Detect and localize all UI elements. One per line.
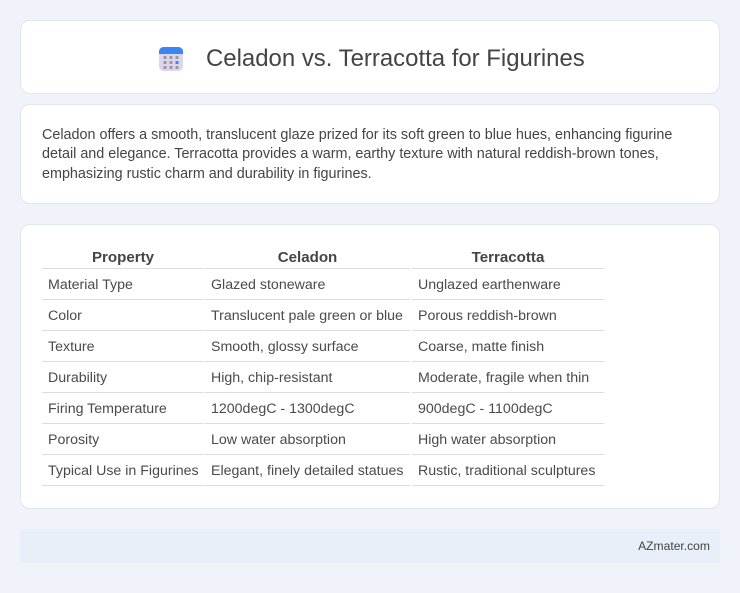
intro text [42, 126, 672, 182]
comparison table: High, chip-resistant [211, 370, 332, 386]
comparison table: Moderate, fragile when thin [418, 370, 589, 386]
comparison table: Elegant, finely detailed statues [211, 463, 403, 479]
table card [20, 224, 720, 509]
header card [20, 20, 720, 94]
comparison table: Glazed stoneware [211, 277, 325, 293]
comparison table: Color [48, 308, 82, 324]
footer bar [20, 529, 720, 563]
comparison table: Low water absorption [211, 432, 346, 448]
comparison table: Coarse, matte finish [418, 339, 544, 355]
comparison table: Texture [48, 339, 95, 355]
intro card [20, 104, 720, 204]
title: Celadon vs. Terracotta for Figurines [206, 45, 585, 72]
comparison table [42, 249, 604, 486]
intro text: emphasizing rustic charm and durability in figurines. [42, 166, 372, 182]
intro text: Celadon offers a smooth, translucent glaze prized for its soft green to blue hues, enhancing figurine [42, 126, 672, 142]
comparison table: Porous reddish-brown [418, 308, 557, 324]
comparison table: Firing Temperature [48, 401, 167, 417]
comparison table: Porosity [48, 432, 99, 448]
comparison table: Unglazed earthenware [418, 277, 561, 293]
comparison table: 1200degC - 1300degC [211, 401, 355, 417]
comparison table: 900degC - 1100degC [418, 401, 553, 417]
comparison table: Material Type [48, 277, 133, 293]
comparison table: Typical Use in Figurines [48, 463, 199, 479]
comparison table: Property [92, 249, 154, 266]
comparison table: Translucent pale green or blue [211, 308, 403, 324]
comparison table: Rustic, traditional sculptures [418, 463, 595, 479]
comparison table: Celadon [278, 249, 337, 266]
intro text: detail and elegance. Terracotta provides a warm, earthy texture with natural reddish-brown tones, [42, 146, 659, 162]
footer source: AZmater.com [638, 539, 710, 553]
comparison table: Terracotta [472, 249, 544, 266]
comparison table: Smooth, glossy surface [211, 339, 358, 355]
icon: calendar [159, 47, 183, 71]
comparison table: High water absorption [418, 432, 556, 448]
comparison table: Durability [48, 370, 107, 386]
